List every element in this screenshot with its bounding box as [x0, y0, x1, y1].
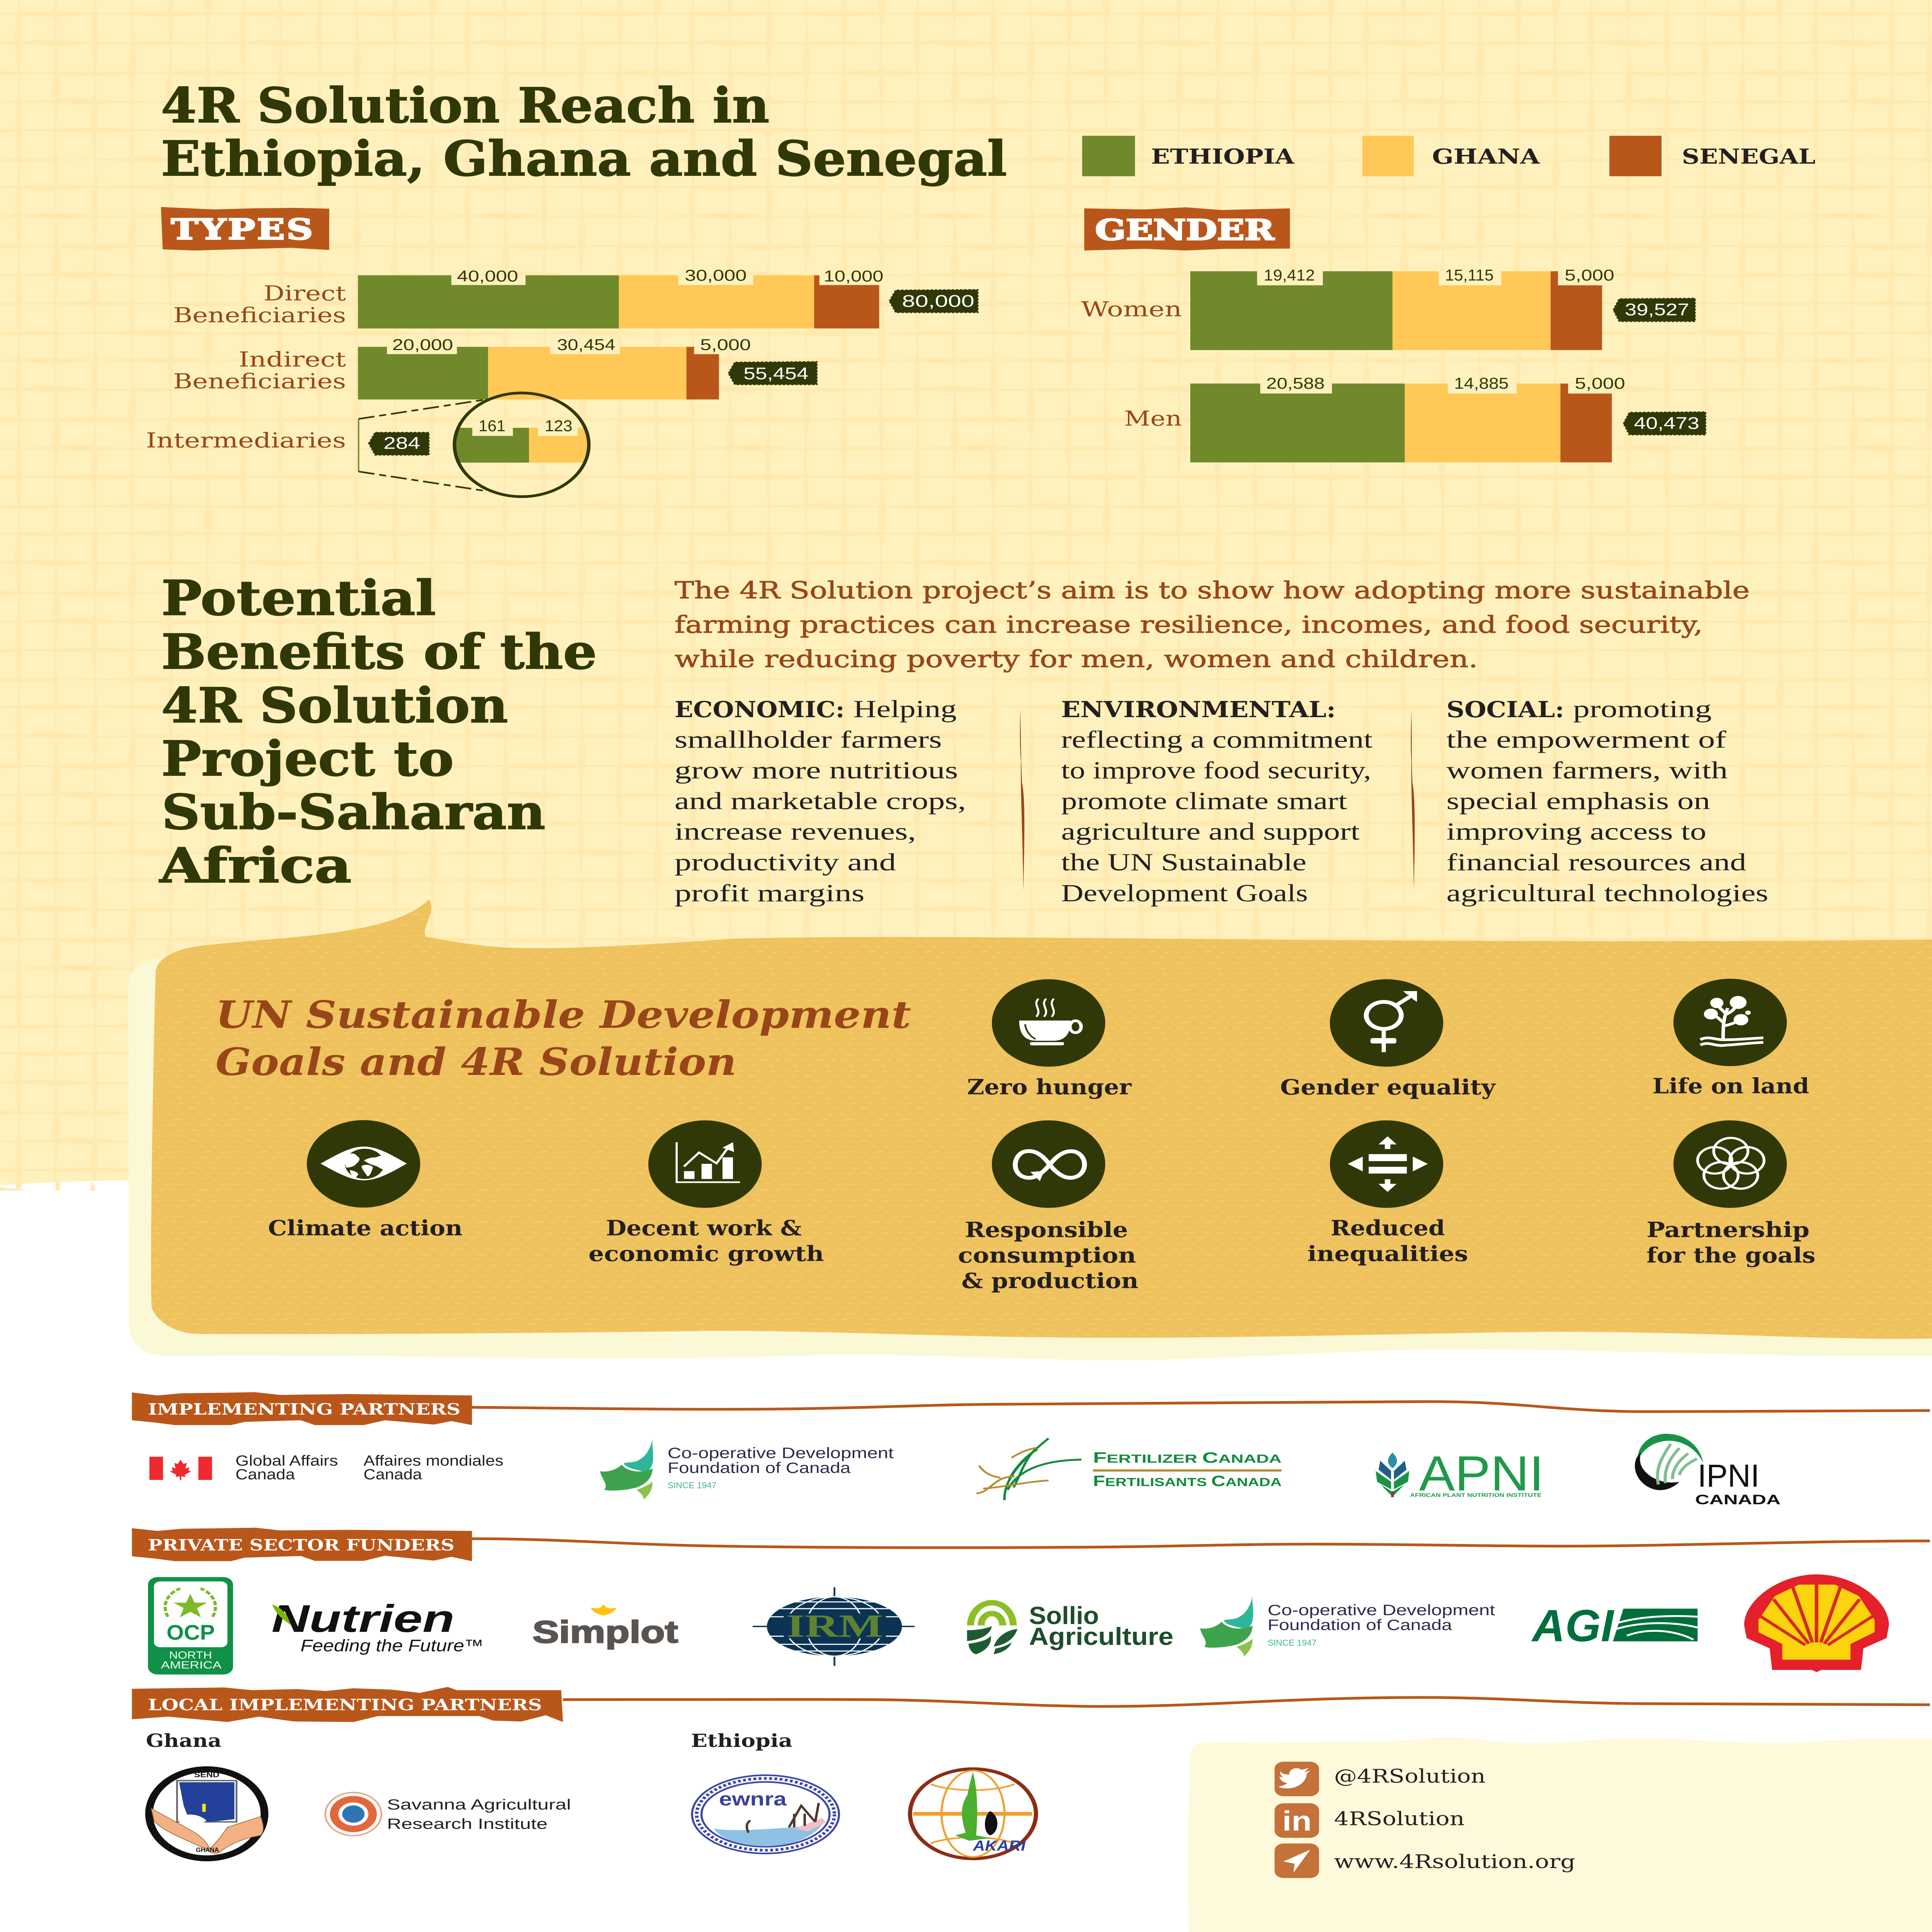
section: local implementing partners [132, 1687, 1930, 1859]
text column: environmental: the UN Sustainable [1061, 849, 1306, 876]
banner: private sector funders [132, 1528, 1930, 1561]
heading: gender: GENDER [1095, 213, 1275, 247]
logo: Co-operative Development Foundation of Canada (funder) [1200, 1596, 1495, 1657]
logo: SEND Ghana: SEND [194, 1770, 219, 1779]
goal: partnership [1646, 1121, 1815, 1268]
logo: OCP North America: NORTH [169, 1649, 212, 1661]
goal: responsible consumption: & production [961, 1268, 1138, 1293]
bar: indirect beneficiaries: Beneficiaries [173, 369, 346, 393]
logo: Co-operative Development Foundation of Canada: SINCE 1947 [668, 1481, 716, 1490]
goal: responsible consumption: consumption [958, 1243, 1136, 1268]
logo: Global Affairs Canada: Global Affairs [235, 1452, 338, 1469]
contact: twitter [1275, 1762, 1486, 1796]
sub-heading: Ghana: Ghana [146, 1730, 221, 1751]
bar: men: 5,000 [1575, 375, 1625, 392]
bar: men: Men [1124, 406, 1182, 431]
text column: environmental: agriculture and support [1061, 818, 1360, 845]
logo: Sollio Agriculture: Agriculture [1029, 1622, 1173, 1650]
bar: indirect beneficiaries: 30,454 [557, 336, 616, 354]
banner: implementing partners [132, 1392, 1930, 1425]
goal: life on land [1653, 979, 1809, 1099]
panel: UN Sustainable Development Goals [128, 899, 1932, 1360]
text column: environmental: ENVIRONMENTAL: [1061, 696, 1336, 723]
text column: social: the empowerment of [1446, 726, 1726, 753]
text column: economic: profit margins [675, 879, 864, 906]
banner: private sector funders: PRIVATE SECTOR FUNDERS [148, 1536, 454, 1554]
bar: indirect beneficiaries [173, 336, 817, 400]
sub-heading: Ethiopia: Ethiopia [691, 1730, 793, 1751]
goal: decent work: Decent work & [606, 1216, 801, 1240]
chart: beneficiary types [146, 267, 978, 497]
goal: decent work [588, 1121, 824, 1266]
logo: Co-operative Development Foundation of Canada (funder): Co-operative Development [1268, 1602, 1495, 1619]
goal: gender equality [1280, 979, 1496, 1099]
text column: social: financial resources and [1446, 849, 1746, 876]
logo: Nutrien: Feeding the Future™ [301, 1636, 483, 1655]
goal: partnership: for the goals [1646, 1243, 1815, 1268]
legend: countries: ETHIOPIA [1151, 144, 1294, 168]
panel body [151, 899, 1932, 1339]
logo: Shell [1744, 1574, 1889, 1672]
goal: reduced inequalities [1308, 1121, 1468, 1266]
contact: linkedin: in [1282, 1805, 1312, 1837]
bar: intermediaries with magnifier: 161 [479, 417, 505, 435]
logo: Simplot: Simplot [532, 1615, 678, 1649]
heading: types: TYPES [171, 213, 313, 246]
logo: SEND Ghana: GHANA [196, 1847, 219, 1854]
logo: APNI: AFRICAN PLANT NUTRITION INSTITUTE [1410, 1492, 1542, 1498]
text column: social: improving access to [1446, 818, 1706, 845]
legend: countries [1082, 136, 1815, 176]
logo: AGI [1531, 1600, 1697, 1651]
goal: gender equality: Gender equality [1280, 1075, 1496, 1099]
bar: intermediaries with magnifier: 123 [545, 417, 572, 435]
logo: Co-operative Development Foundation of Canada [600, 1439, 894, 1500]
heading: potential benefits [159, 570, 597, 894]
heading: UN goals: UN Sustainable Development [216, 992, 911, 1037]
heading: potential benefits: 4R Solution [161, 677, 508, 734]
text column: social: SOCIAL: [1446, 696, 1564, 723]
text column: social: special emphasis on [1446, 787, 1710, 815]
text column: social: promoting [1573, 695, 1712, 723]
text column: economic: smallholder farmers [675, 726, 942, 753]
heading: potential benefits: Potential [161, 570, 436, 626]
heading: potential benefits: Sub-Saharan [162, 784, 546, 840]
logo: Savanna Agricultural Research Institute: Research Institute [387, 1816, 548, 1832]
bar: women: 39,527 [1625, 300, 1689, 319]
bar: intermediaries with magnifier [146, 393, 589, 497]
text column: environmental: promote climate smart [1061, 787, 1347, 815]
contact: website [1275, 1844, 1575, 1878]
legend: countries: SENEGAL [1682, 144, 1815, 168]
bar: direct beneficiaries: 80,000 [902, 292, 975, 311]
bar: direct beneficiaries: 10,000 [823, 267, 883, 285]
contact: twitter: @4RSolution [1334, 1765, 1486, 1787]
heading: potential benefits: Benefits of the [161, 624, 597, 680]
logo: OCP North America: AMERICA [161, 1659, 222, 1671]
goal: life on land: Life on land [1653, 1074, 1809, 1099]
logo: OCP North America: OCP [167, 1621, 215, 1645]
logo: Sollio Agriculture: Sollio [1029, 1602, 1099, 1629]
logo: AKARI [910, 1769, 1036, 1859]
intro paragraph [675, 577, 1750, 673]
contact: linkedin: 4RSolution [1334, 1808, 1464, 1830]
bar: direct beneficiaries [173, 267, 978, 328]
title: reach [161, 77, 1007, 187]
logo: IRM: IRM [786, 1608, 883, 1644]
panel: contact [1188, 1738, 1932, 1932]
bar: indirect beneficiaries: 5,000 [700, 336, 751, 354]
logo: AKARI: AKARI [973, 1838, 1026, 1854]
logo: EWNRA: ewnra [719, 1788, 787, 1810]
logo: OCP North America [148, 1577, 233, 1675]
logo: IPNI Canada [1635, 1434, 1781, 1507]
logo: Global Affairs Canada [150, 1452, 503, 1483]
text column: environmental [1061, 696, 1373, 906]
logo: Savanna Agricultural Research Institute: Savanna Agricultural [387, 1796, 571, 1813]
bar: men: 40,473 [1634, 414, 1699, 432]
logo: APNI [1376, 1446, 1544, 1501]
bar: direct beneficiaries: Direct [264, 281, 346, 305]
title: reach: 4R Solution Reach in [161, 77, 769, 134]
logo: AGI: AGI [1531, 1600, 1615, 1651]
heading: UN goals: Goals and 4R Solution [216, 1040, 736, 1084]
logo: Fertilizer Canada [976, 1438, 1282, 1500]
logo: Savanna Agricultural Research Institute [325, 1793, 571, 1836]
logo: Global Affairs Canada: Affaires mondiales [364, 1452, 503, 1469]
logo: IRM [753, 1587, 915, 1666]
logo: Co-operative Development Foundation of Canada (funder): Foundation of Canada [1268, 1616, 1452, 1633]
logo: Fertilizer Canada: FERTILISANTS CANADA [1093, 1473, 1282, 1490]
logo: IPNI Canada: CANADA [1695, 1492, 1781, 1507]
heading: potential benefits: Africa [159, 837, 352, 894]
text column: environmental: Development Goals [1061, 879, 1308, 906]
text column: economic: productivity and [675, 849, 896, 876]
logo: Co-operative Development Foundation of Canada: Co-operative Development [668, 1444, 894, 1461]
background: woven cream paper [0, 0, 1932, 1190]
bar: indirect beneficiaries: 55,454 [743, 364, 809, 383]
logo: IPNI Canada: IPNI [1697, 1458, 1760, 1494]
text column: economic: grow more nutritious [675, 757, 958, 784]
text column: economic: ECONOMIC: [675, 696, 845, 723]
bar: men: 20,588 [1266, 375, 1325, 392]
bar: men: 14,885 [1454, 375, 1509, 392]
bar: indirect beneficiaries: 20,000 [392, 336, 453, 354]
goal: responsible consumption [958, 1121, 1138, 1293]
text column: economic: Helping [853, 695, 957, 723]
goal: zero hunger [967, 979, 1132, 1099]
text column: social [1446, 695, 1768, 906]
goal: climate action: Climate action [268, 1216, 463, 1240]
bar: women: 5,000 [1565, 266, 1614, 284]
logo: SEND Ghana [149, 1769, 265, 1858]
logo: Nutrien: Nutrien [272, 1597, 454, 1640]
bar: women: 19,412 [1264, 266, 1315, 284]
bar: intermediaries with magnifier: Intermediaries [146, 428, 346, 452]
goal: partnership: Partnership [1646, 1217, 1810, 1242]
section: implementing partners [132, 1392, 1930, 1507]
text column: environmental: reflecting a commitment [1061, 726, 1373, 753]
bar: direct beneficiaries: 30,000 [685, 267, 747, 284]
bar: intermediaries with magnifier: 284 [383, 434, 420, 452]
legend: countries: GHANA [1432, 144, 1540, 168]
text column: social: agricultural technologies [1446, 879, 1768, 906]
bar: direct beneficiaries: 40,000 [457, 267, 518, 285]
goal: zero hunger: Zero hunger [967, 1075, 1132, 1099]
heading: gender [1084, 207, 1290, 250]
banner: local implementing partners [132, 1687, 1930, 1722]
logo: Global Affairs Canada: Canada [364, 1466, 422, 1483]
bar: direct beneficiaries: Beneficiaries [173, 303, 346, 327]
logo: EWNRA [692, 1775, 839, 1854]
logo: Global Affairs Canada: Canada [235, 1466, 295, 1483]
intro paragraph: The 4R Solution project’s aim is to show how adopting more sustainable [675, 577, 1750, 604]
bar: men [1124, 375, 1706, 463]
title: reach: Ethiopia, Ghana and Senegal [161, 130, 1007, 187]
bar: indirect beneficiaries: Indirect [239, 347, 346, 372]
text column: economic: increase revenues, [675, 818, 916, 845]
intro paragraph: farming practices can increase resilience, incomes, and food security, [675, 611, 1703, 638]
goal: climate action [268, 1120, 463, 1240]
contact: website: www.4Rsolution.org [1334, 1851, 1575, 1873]
heading: UN goals [216, 992, 911, 1084]
heading: potential benefits: Project to [161, 730, 454, 787]
logo: Nutrien [272, 1597, 483, 1655]
bar: women [1081, 266, 1695, 350]
banner: implementing partners: IMPLEMENTING PARTNERS [148, 1400, 461, 1418]
chart: gender [1081, 266, 1706, 463]
intro paragraph: while reducing poverty for men, women and children. [675, 646, 1478, 673]
goal: decent work: economic growth [588, 1242, 824, 1266]
logo: APNI: APNI [1419, 1446, 1544, 1501]
bar: women: Women [1081, 297, 1182, 321]
logo: Sollio Agriculture [967, 1602, 1173, 1654]
bar: women: 15,115 [1445, 266, 1493, 284]
text column: economic [675, 695, 966, 906]
logo: Fertilizer Canada: FERTILIZER CANADA [1093, 1449, 1282, 1466]
goal: responsible consumption: Responsible [965, 1217, 1128, 1242]
panel shadow [128, 907, 1932, 1360]
banner: local implementing partners: LOCAL IMPLEMENTING PARTNERS [148, 1696, 542, 1714]
logo: Co-operative Development Foundation of Canada: Foundation of Canada [668, 1459, 851, 1476]
goal: reduced inequalities: Reduced [1330, 1216, 1445, 1240]
goal: reduced inequalities: inequalities [1308, 1242, 1468, 1266]
text column: environmental: to improve food security, [1061, 757, 1371, 784]
text column: social: women farmers, with [1446, 757, 1728, 784]
heading: types [161, 207, 329, 250]
section: private sector funders [132, 1528, 1930, 1675]
logo: Co-operative Development Foundation of Canada (funder): SINCE 1947 [1268, 1638, 1316, 1648]
contact: linkedin [1275, 1803, 1464, 1838]
text column: economic: and marketable crops, [675, 787, 966, 815]
